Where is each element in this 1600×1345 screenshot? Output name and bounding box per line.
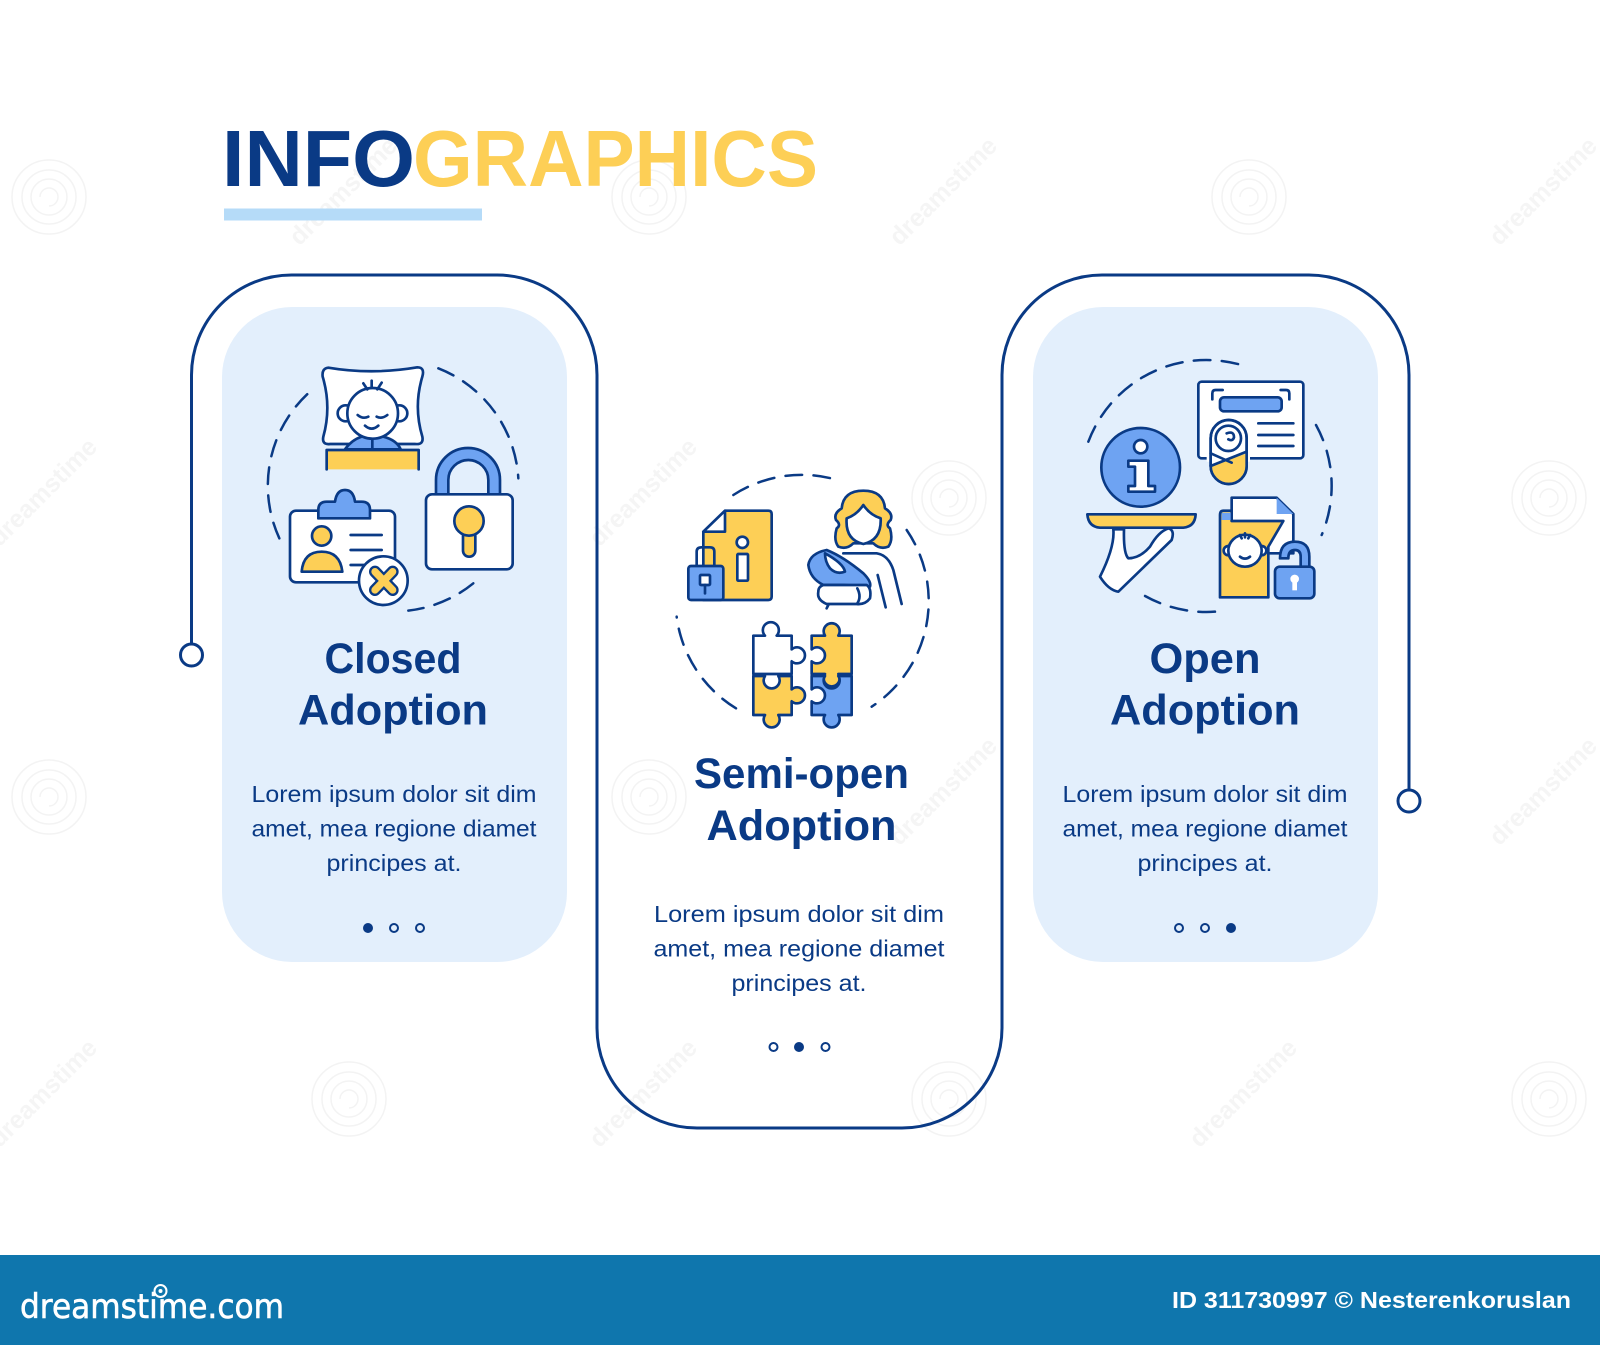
title underline	[224, 208, 482, 220]
text block: open adoption	[1062, 781, 1348, 876]
text block: closed adoption: principes at.	[326, 850, 462, 876]
panel: open adoption	[1033, 307, 1378, 962]
heading: closed adoption: Adoption	[298, 686, 488, 734]
infographic canvas: dreamstime	[1484, 132, 1600, 251]
panel: closed adoption	[222, 307, 567, 962]
title: INFO	[222, 114, 415, 203]
title: GRAPHICS	[413, 114, 818, 203]
footer credit: ID 311730997 © Nesterenkoruslan	[1172, 1287, 1571, 1313]
infographic canvas: dreamstime	[284, 732, 403, 851]
infographic canvas: dreamstime	[1184, 1034, 1303, 1153]
text block: open adoption: Lorem ipsum dolor sit dim	[1062, 781, 1348, 807]
text block: semi-open adoption: Lorem ipsum dolor sit dim	[654, 901, 944, 927]
text block: semi-open adoption	[654, 901, 945, 996]
page dots: third active	[1175, 924, 1235, 932]
icon: open adoption	[1087, 360, 1332, 612]
heading: semi-open adoption: Semi-open	[694, 750, 909, 798]
footer bar	[0, 1255, 1600, 1345]
footer logo text: dreamstime.com	[20, 1287, 284, 1327]
infographic canvas: dreamstime	[1184, 433, 1303, 552]
heading: semi-open adoption	[694, 750, 909, 850]
text block: semi-open adoption: amet, mea regione diamet	[654, 936, 945, 962]
text block: semi-open adoption: principes at.	[732, 970, 866, 996]
title	[222, 114, 818, 203]
icon: semi-open adoption	[677, 475, 929, 727]
text block: open adoption: amet, mea regione diamet	[1062, 816, 1348, 842]
infographic canvas: dreamstime	[584, 433, 703, 552]
infographic canvas: dreamstime	[584, 1034, 703, 1153]
page dots: second active	[770, 1043, 830, 1051]
heading: closed adoption: Closed	[324, 635, 462, 683]
heading: open adoption	[1110, 635, 1300, 734]
infographic canvas: dreamstime	[1484, 732, 1600, 851]
page dots: first active	[364, 924, 424, 932]
connecting outline	[180, 275, 1420, 1128]
infographic canvas: dreamstime	[284, 132, 403, 251]
heading: closed adoption	[298, 635, 488, 734]
heading: open adoption: Adoption	[1110, 686, 1300, 734]
infographic canvas: dreamstime	[884, 132, 1003, 251]
panel: semi-open adoption	[654, 475, 945, 1051]
heading: open adoption: Open	[1150, 635, 1260, 683]
icon: closed adoption	[268, 367, 518, 611]
heading: semi-open adoption: Adoption	[706, 802, 896, 850]
text block: closed adoption: Lorem ipsum dolor sit dim	[252, 781, 536, 807]
text block: closed adoption	[252, 781, 537, 876]
text block: open adoption: principes at.	[1138, 850, 1272, 876]
text block: closed adoption: amet, mea regione diamet	[252, 816, 537, 842]
infographic canvas: dreamstime	[884, 732, 1003, 851]
